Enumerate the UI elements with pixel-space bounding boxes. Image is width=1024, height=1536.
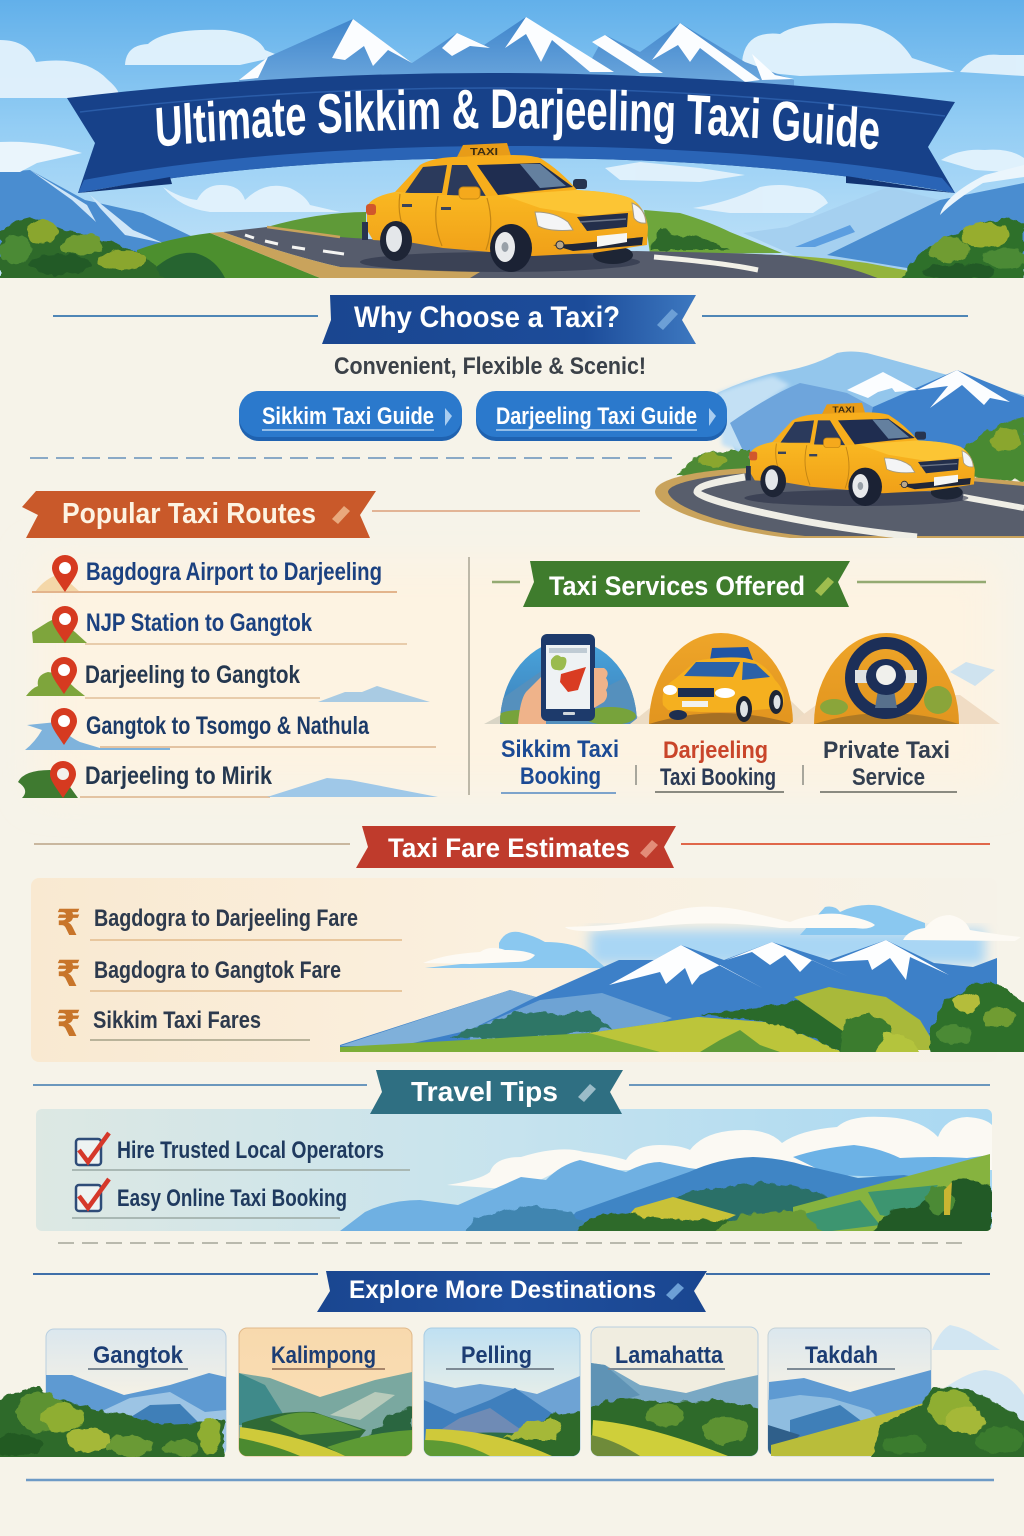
service: darjeeling taxi booking: Taxi Booking — [660, 764, 776, 791]
section heading: why choose a taxi — [53, 295, 968, 344]
button: darjeeling — [476, 391, 727, 441]
fare item 1: Bagdogra to Darjeeling Fare — [94, 905, 358, 932]
button: darjeeling: Darjeeling Taxi Guide — [496, 403, 697, 430]
green hills — [137, 233, 320, 278]
card: takdah — [768, 1328, 931, 1456]
card: takdah: Takdah — [805, 1342, 878, 1369]
route 3 — [26, 657, 430, 702]
hero taxi — [360, 143, 648, 272]
tip 1 — [72, 1133, 410, 1170]
route 5 — [18, 761, 438, 798]
section heading: why choose a taxi: Why Choose a Taxi? — [354, 301, 620, 334]
button: sikkim — [239, 391, 462, 441]
title banner — [67, 73, 955, 193]
section heading: travel tips — [33, 1070, 990, 1114]
service: sikkim taxi booking — [484, 634, 650, 793]
card: gangtok: Gangtok — [93, 1342, 184, 1369]
right forest — [900, 218, 1024, 282]
fare item 2: Bagdogra to Gangtok Fare — [94, 957, 341, 984]
section heading: explore more destinations: Explore More Destinations — [349, 1276, 656, 1304]
destination cards — [46, 1327, 931, 1460]
service: private taxi service — [790, 633, 1000, 792]
road — [223, 227, 887, 282]
panel: fare estimates — [31, 878, 1024, 1062]
taxi: TAXI — [832, 405, 855, 414]
route list — [18, 555, 438, 798]
fare item 1 — [56, 902, 402, 943]
mountain range — [239, 17, 794, 86]
tip 2: Easy Online Taxi Booking — [117, 1185, 347, 1212]
foreground forest: left — [0, 1386, 224, 1465]
service label: Private Taxi — [823, 737, 950, 764]
section heading: taxi services — [492, 561, 986, 607]
fare item 2: ₹ — [56, 953, 81, 994]
cloud accents — [932, 1325, 1024, 1430]
route 3: Darjeeling to Gangtok — [85, 661, 300, 689]
foreground forest: right — [771, 1387, 1024, 1465]
section heading: fare estimates: Taxi Fare Estimates — [388, 833, 630, 863]
fare item 3: ₹ — [56, 1003, 81, 1044]
card: lamahatta — [585, 1327, 765, 1460]
route 4: Gangtok to Tsomgo & Nathula — [86, 712, 370, 740]
section heading: travel tips: Travel Tips — [411, 1076, 558, 1107]
subheading: Convenient, Flexible & Scenic! — [334, 353, 646, 380]
guide buttons — [239, 391, 727, 441]
fare item 1: ₹ — [56, 902, 81, 943]
route 5: Darjeeling to Mirik — [85, 762, 272, 790]
card: gangtok — [46, 1329, 226, 1456]
clouds — [0, 23, 1024, 213]
fare item 3 — [56, 1003, 310, 1044]
service: sikkim taxi booking: Booking — [520, 763, 601, 790]
fare item 3: Sikkim Taxi Fares — [93, 1007, 261, 1034]
section heading: fare estimates — [34, 826, 990, 868]
sky band — [590, 930, 985, 965]
route 4 — [25, 708, 436, 750]
tip 1: Hire Trusted Local Operators — [117, 1137, 384, 1164]
title text: Ultimate Sikkim & Darjeeling Taxi Guide — [156, 88, 879, 150]
card: kalimpong: Kalimpong — [271, 1342, 376, 1369]
section heading: popular routes — [22, 491, 640, 538]
side mountains — [0, 170, 193, 265]
icon: phone with map — [484, 634, 650, 726]
panel: travel tips — [36, 1109, 992, 1240]
card: lamahatta: Lamahatta — [615, 1342, 724, 1369]
service label: Sikkim Taxi — [501, 736, 619, 763]
service label: Darjeeling — [663, 737, 768, 764]
mountains — [340, 940, 997, 1050]
tip 2 — [72, 1179, 347, 1218]
icon: yellow taxi — [630, 633, 815, 724]
left forest — [0, 217, 165, 282]
route 2 — [32, 606, 407, 644]
fare landscape — [340, 905, 1024, 1058]
right scenic taxi illustration — [655, 352, 1024, 538]
section heading: popular routes: Popular Taxi Routes — [62, 498, 316, 530]
route 2: NJP Station to Gangtok — [86, 609, 312, 637]
hero taxi: TAXI — [470, 147, 498, 158]
taxi — [744, 403, 975, 506]
hills — [340, 1017, 842, 1052]
service: private taxi service: Service — [852, 764, 925, 791]
fare item 2 — [56, 953, 402, 994]
route 1: Bagdogra Airport to Darjeeling — [86, 558, 382, 586]
icon: steering wheel — [790, 633, 1000, 724]
card: pelling: Pelling — [461, 1342, 532, 1369]
card: kalimpong — [239, 1328, 412, 1460]
button: sikkim: Sikkim Taxi Guide — [262, 403, 434, 430]
tips landscape — [340, 1117, 992, 1240]
section heading: explore more destinations — [33, 1271, 990, 1312]
hero illustration — [0, 0, 1024, 282]
service: darjeeling taxi booking — [630, 633, 815, 792]
card: pelling — [424, 1328, 585, 1460]
section heading: taxi services: Taxi Services Offered — [549, 571, 805, 601]
route 1 — [32, 555, 397, 592]
